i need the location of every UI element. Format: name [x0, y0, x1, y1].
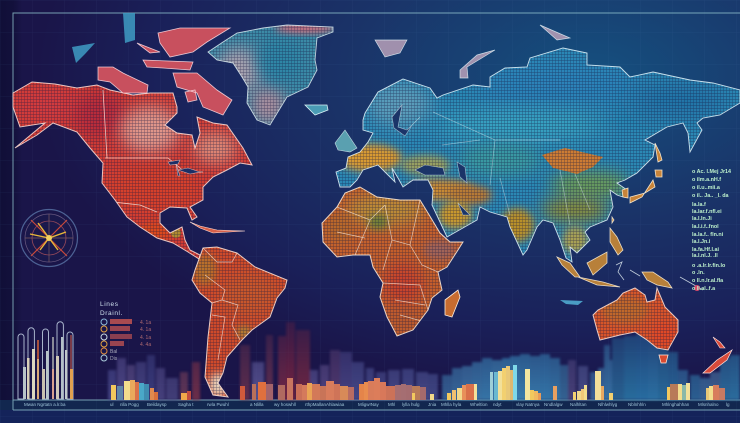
map: Africa — [322, 186, 464, 337]
legend rows: 4. 1a — [140, 320, 151, 326]
map: Greenland — [207, 24, 334, 126]
capsule outlines — [18, 322, 73, 399]
right data panel: la.fa.Hf.l.ai — [692, 247, 719, 253]
capsule fills — [23, 335, 73, 399]
bottom axis labels: Beildaysp — [147, 402, 167, 407]
bottom axis labels: rthpMallanAhlawiaa — [305, 402, 345, 407]
Great Lakes — [168, 160, 200, 176]
right data panel: o .a.lr.lr.fin.lo — [692, 263, 726, 269]
bottom axis labels: nlla Pogg — [120, 402, 139, 407]
bright foreground bars — [111, 365, 725, 400]
legend rows — [101, 319, 151, 362]
map: Southeast Asia and Oceania islands — [557, 217, 703, 291]
legend heading: Lines — [100, 301, 119, 308]
bottom axis labels: Mhlnghahhan — [662, 402, 690, 407]
bottom axis labels: Nalhltan — [570, 402, 587, 407]
Indian Ocean islets — [560, 300, 583, 305]
bottom axis labels — [24, 402, 730, 407]
right data panel: la.la.f — [692, 202, 706, 208]
Caribbean islands — [190, 222, 245, 233]
legend rows: 4. 4a — [140, 342, 151, 348]
inland seas — [392, 105, 470, 215]
Canadian Arctic islands — [98, 28, 232, 115]
bottom axis labels: Mlsnhalno — [698, 402, 719, 407]
bottom axis labels: a Nlilla — [250, 402, 264, 407]
faded background bars — [108, 322, 740, 400]
right data panel: o il.u..mii.a — [692, 185, 721, 191]
bottom axis labels: Wheltlon — [470, 402, 488, 407]
compass dial — [20, 210, 78, 266]
map: North America — [12, 13, 253, 260]
bottom axis labels: lylla hulg — [402, 402, 420, 407]
Mongolia — [542, 148, 603, 174]
right data panel: o .ln. — [692, 270, 705, 276]
right data panel: la.l.i.f..fnol — [692, 224, 719, 230]
northern blue islets — [72, 13, 135, 63]
bottom bar chart — [108, 322, 740, 400]
Madagascar — [445, 290, 460, 317]
legend rows: 4. 1a — [140, 327, 151, 333]
right data panel — [692, 169, 731, 292]
right data panel: o ilm.a.nH.f — [692, 177, 721, 183]
bottom axis labels: Mhl — [388, 402, 395, 407]
bottom axis labels: Mhlla hyla — [441, 402, 462, 407]
right data panel: la.l.ln.Ji — [692, 216, 712, 222]
British Isles — [335, 130, 357, 152]
bottom axis labels: ul — [110, 402, 114, 407]
right data panel: la.l.Jn.i — [692, 239, 711, 245]
right data panel: o il.. Ja.. _l. da — [692, 193, 730, 199]
legend block — [100, 301, 151, 362]
map: Iceland — [305, 105, 328, 115]
bottom axis labels: ndyt — [493, 402, 502, 407]
legend heading — [100, 301, 123, 317]
bottom axis labels: Jnia — [428, 402, 437, 407]
legend rows: Dis — [110, 356, 118, 362]
Japan, Korea and Sakhalin — [622, 143, 662, 203]
legend heading: Drainl. — [100, 310, 123, 317]
bottom axis labels: rwla Pwuhl — [207, 402, 229, 407]
bottom axis labels: Nblnhhln — [628, 402, 646, 407]
map: New Zealand — [703, 337, 732, 373]
legend rows: Bal — [110, 349, 117, 355]
legend rows: 4. 1a — [140, 335, 151, 341]
bottom axis labels: Nndlalgw — [544, 402, 563, 407]
bottom axis labels: Sagha t — [178, 402, 194, 407]
bottom axis labels: Nlhlwhlyg — [598, 402, 618, 407]
map: Australia — [592, 286, 678, 364]
map: Eurasia — [320, 25, 740, 280]
right data panel: o ll.al..f.a — [692, 286, 716, 292]
map: South America — [192, 246, 288, 398]
bottom axis labels: Mligw!Nay — [358, 402, 380, 407]
bottom axis labels: wy hoswhll — [274, 402, 296, 407]
right data panel: o ll.n.lr.al.fla — [692, 278, 724, 284]
Fiji marker — [694, 285, 700, 291]
bottom axis labels: lg — [726, 402, 730, 407]
Arctic islands — [375, 25, 570, 78]
Tasmania — [659, 355, 668, 363]
right data panel: o Ac. l.Mej Jr14 — [692, 169, 731, 175]
right data panel: la.lar.f.nfl.ei — [692, 209, 722, 215]
right data panel: la.l.nl.J. .ll — [692, 253, 718, 259]
capsule chart — [18, 322, 73, 399]
bottom axis labels: vlay Natnya — [516, 402, 540, 407]
bottom axis labels: Mwan Ngrtatn a.lr.ba — [24, 402, 66, 407]
right data panel: la.la.f.. fln.ni — [692, 232, 724, 238]
